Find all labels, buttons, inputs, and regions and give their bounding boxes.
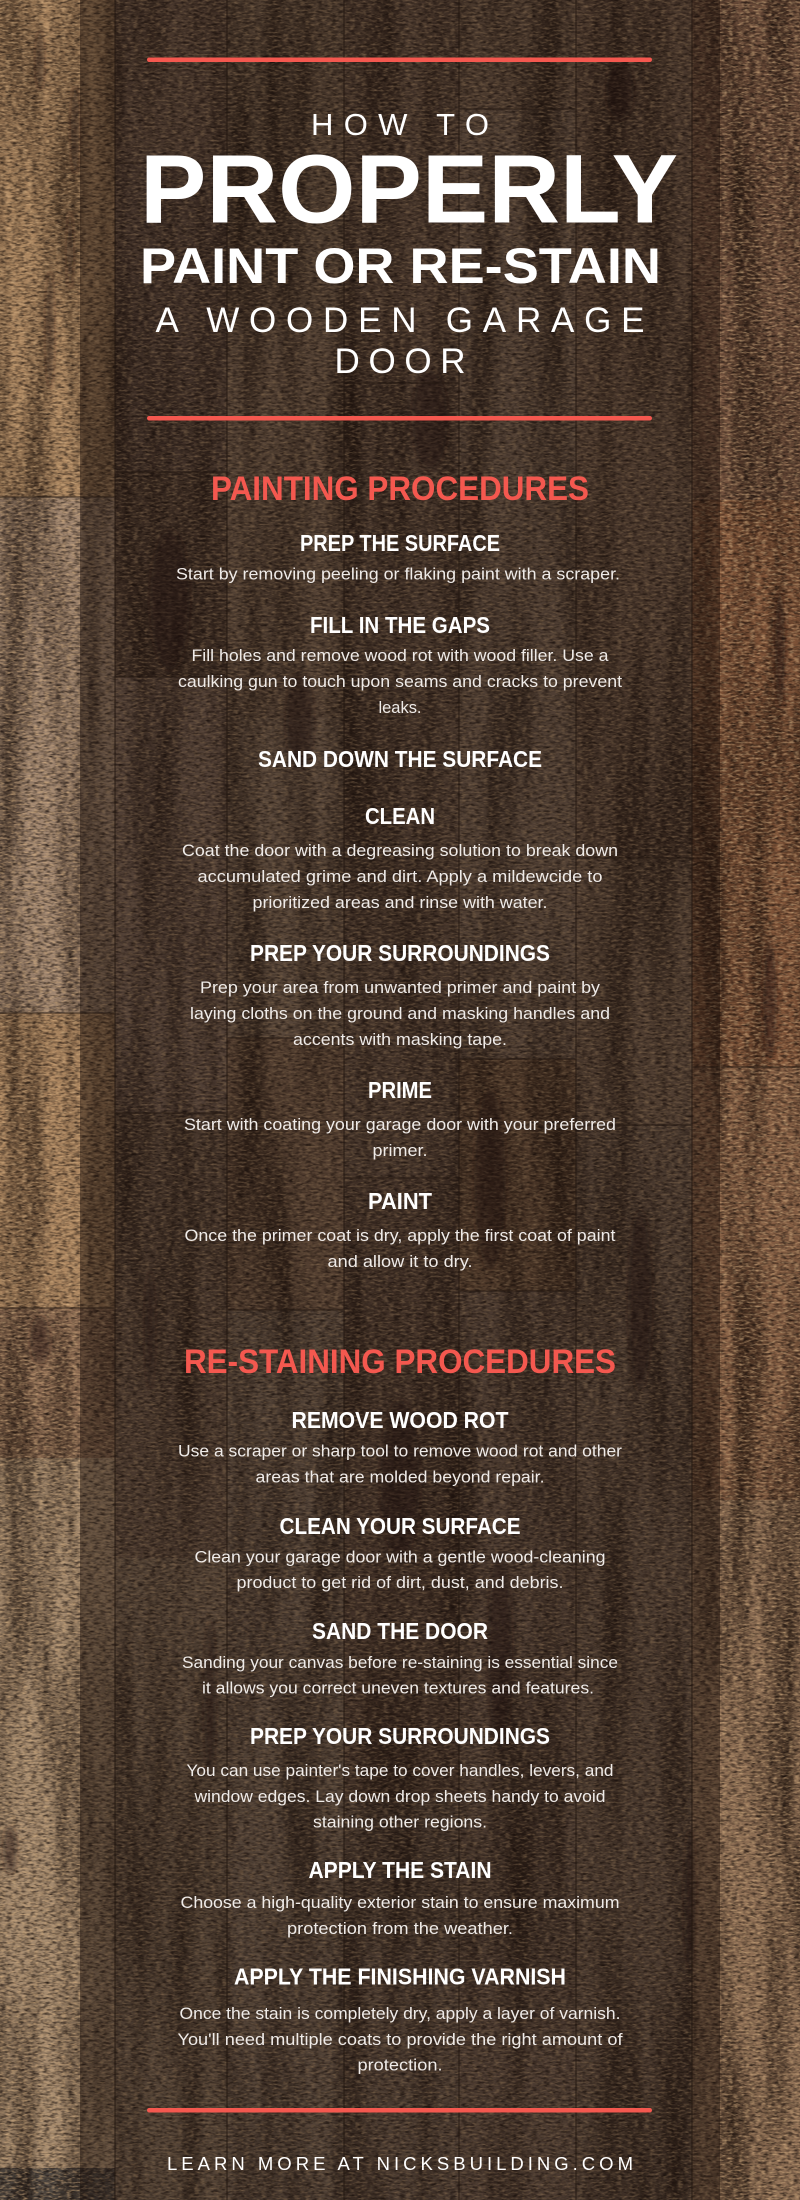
step: prime: [184, 1077, 616, 1160]
step: prep the surface: PREP THE SURFACE: [300, 530, 500, 556]
step: apply the finishing varnish: protection.: [358, 2056, 442, 2074]
panel: dark translucent overlay: [80, 0, 720, 2200]
column F: [576, 0, 692, 2200]
step: clean: accumulated grime and dirt. Apply a mildewcide to: [198, 868, 602, 886]
step: remove wood rot: Use a scraper or sharp tool to remove wood rot and other: [178, 1442, 623, 1460]
step: remove wood rot: areas that are molded beyond repair.: [256, 1468, 544, 1486]
section: re-staining procedures: [178, 1343, 623, 2074]
step: prime: primer.: [372, 1142, 428, 1160]
step: prep your surroundings: Prep your area from unwanted primer and paint by: [200, 979, 601, 997]
step: prep your surroundings: [186, 1723, 614, 1832]
step: sand the door: SAND THE DOOR: [312, 1618, 488, 1644]
step: prep the surface: Start by removing peeling or flaking paint with a scraper.: [176, 566, 620, 584]
step: clean: CLEAN: [365, 803, 435, 829]
top rule: [147, 58, 652, 62]
step: prep your surroundings: PREP YOUR SURROUNDINGS: [250, 940, 550, 966]
bottom rule: [147, 2108, 652, 2112]
step: prep your surroundings: accents with masking tape.: [293, 1031, 507, 1049]
step: fill in the gaps: Fill holes and remove wood rot with wood filler. Use a: [192, 647, 609, 665]
step: prep your surroundings: laying cloths on the ground and masking handles and: [190, 1005, 610, 1023]
step: apply the finishing varnish: APPLY THE FINISHING VARNISH: [234, 1964, 566, 1990]
column B: [115, 0, 227, 2200]
step: apply the finishing varnish: Once the stain is completely dry, apply a layer of varnish.: [180, 2005, 620, 2023]
step: sand down the surface: SAND DOWN THE SURFACE: [258, 746, 542, 772]
footer call to action: LEARN MORE AT NICKSBUILDING.COM: [167, 2153, 633, 2174]
column D: [344, 0, 459, 2200]
section: painting procedures: [176, 470, 622, 1271]
step: clean: [182, 803, 618, 912]
step: prime: PRIME: [368, 1077, 432, 1103]
step: fill in the gaps: leaks.: [378, 699, 422, 717]
step: clean your surface: [194, 1513, 606, 1592]
step: prime: Start with coating your garage door with your preferred: [184, 1116, 616, 1134]
title line: properly: PROPERLY: [140, 134, 678, 244]
step: fill in the gaps: [178, 612, 622, 717]
step: prep the surface: [176, 530, 620, 584]
step: remove wood rot: [178, 1407, 623, 1486]
title block: [140, 58, 678, 420]
step: prep your surroundings: PREP YOUR SURROUNDINGS: [250, 1723, 550, 1749]
section heading: PAINTING PROCEDURES: [211, 470, 589, 508]
column E: [459, 0, 576, 2200]
step: clean: prioritized areas and rinse with water.: [252, 894, 548, 912]
step: sand the door: [182, 1618, 618, 1698]
section heading: RE-STAINING PROCEDURES: [184, 1343, 616, 1381]
step: paint: [184, 1188, 616, 1271]
step: paint: and allow it to dry.: [328, 1253, 472, 1271]
step: paint: Once the primer coat is dry, apply the first coat of paint: [184, 1227, 616, 1245]
step: apply the stain: protection from the weather.: [287, 1920, 513, 1938]
step: paint: PAINT: [368, 1188, 432, 1214]
step: apply the stain: APPLY THE STAIN: [308, 1857, 492, 1883]
step: clean your surface: Clean your garage door with a gentle wood-cleaning: [194, 1548, 606, 1566]
step: fill in the gaps: FILL IN THE GAPS: [310, 612, 490, 638]
divider rule: [147, 416, 652, 420]
step: clean: Coat the door with a degreasing solution to break down: [182, 842, 618, 860]
step: prep your surroundings: You can use painter's tape to cover handles, levers, and: [186, 1762, 614, 1780]
step: apply the finishing varnish: You'll need multiple coats to provide the right amount of: [178, 2031, 623, 2049]
title line: a wooden garage: A WOODEN GARAGE: [156, 301, 644, 340]
title line: door: DOOR: [334, 342, 466, 381]
step: prep your surroundings: [190, 940, 610, 1049]
step: apply the stain: [180, 1857, 620, 1938]
step: prep your surroundings: window edges. Lay down drop sheets handy to avoid: [193, 1788, 606, 1806]
step: sand the door: Sanding your canvas before re-staining is essential since: [182, 1654, 618, 1672]
step: fill in the gaps: caulking gun to touch upon seams and cracks to prevent: [178, 673, 622, 691]
title line: how to: HOW TO: [311, 107, 489, 142]
column G: [692, 0, 800, 2200]
column A: [0, 0, 115, 2200]
step: remove wood rot: REMOVE WOOD ROT: [292, 1407, 508, 1433]
step: apply the stain: Choose a high-quality exterior stain to ensure maximum: [180, 1894, 620, 1912]
title line: paint or re-stain: PAINT OR RE-STAIN: [140, 238, 661, 294]
column C: [227, 0, 344, 2200]
step: clean your surface: CLEAN YOUR SURFACE: [280, 1513, 520, 1539]
step: prep your surroundings: staining other regions.: [313, 1814, 487, 1832]
step: apply the finishing varnish: [178, 1964, 623, 2074]
step: sand the door: it allows you correct uneven textures and features.: [202, 1680, 594, 1698]
step: clean your surface: product to get rid of dirt, dust, and debris.: [236, 1574, 564, 1592]
